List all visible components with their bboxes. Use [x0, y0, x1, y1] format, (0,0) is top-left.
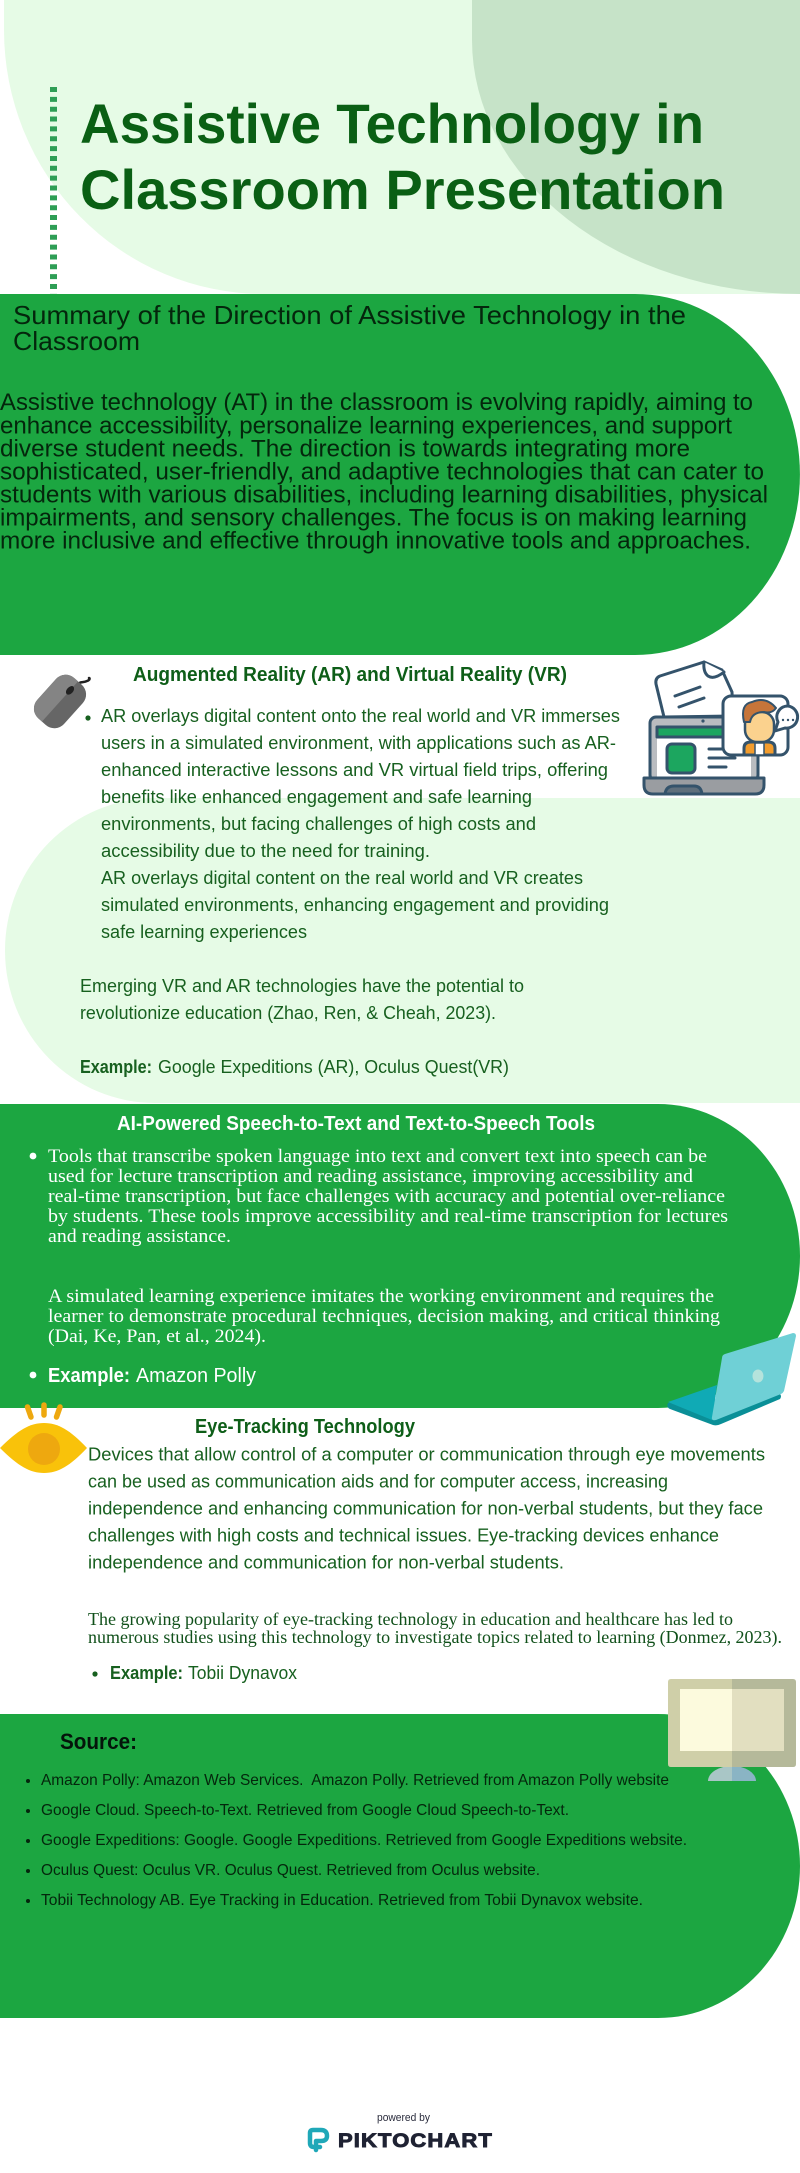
sources heading: Source:: [60, 1729, 137, 1754]
eye tracking example: [92, 1663, 297, 1683]
powered by label: powered by: [377, 2112, 430, 2124]
title: Classroom Presentation: [80, 158, 725, 221]
header background: darker green shape: [472, 0, 800, 294]
eye tracking example: Tobii Dynavox: [188, 1663, 297, 1683]
speech tools text: (Dai, Ke, Pan, et al., 2024).: [48, 1326, 266, 1347]
summary panel background: [0, 294, 800, 655]
eye tracking text: independence and communication for non-verbal students.: [88, 1552, 564, 1572]
powered by Piktochart logo: [310, 2112, 493, 2152]
AR VR bullet text: AR overlays digital content on the real world and VR creates: [101, 868, 583, 888]
summary text: diverse student needs. The direction is towards integrating more: [0, 436, 690, 462]
AR VR bullet text: accessibility due to the need for training.: [101, 841, 430, 861]
title: [80, 92, 725, 221]
speech tools text: used for lecture transcription and reading assistance, improving accessibility and: [48, 1166, 694, 1187]
eye tracking heading: Eye-Tracking Technology: [195, 1416, 416, 1438]
dotted vertical accent: [50, 87, 57, 294]
AR VR citation text: Emerging VR and AR technologies have the potential to: [80, 976, 524, 996]
eye tracking citation: The growing popularity of eye-tracking technology in education and healthcare has led to: [88, 1609, 733, 1629]
AR VR bullet text: environments, but facing challenges of high costs and: [101, 814, 536, 834]
panel: summary: [0, 294, 800, 655]
Piktochart mark: [310, 2130, 327, 2150]
summary text: enhance accessibility, personalize learning experiences, and support: [0, 412, 732, 440]
header background: pale green shape: [4, 0, 800, 294]
icon: teal laptop: [667, 1333, 796, 1425]
summary heading: Summary of the Direction of Assistive Technology in the: [13, 300, 686, 330]
eye tracking citation: numerous studies using this technology to investigate topics related to learning (Donmez, 2023).: [88, 1627, 782, 1648]
speech tools text: Tools that transcribe spoken language into text and convert text into speech can be: [48, 1146, 707, 1167]
icon: computer mouse: [29, 669, 91, 734]
sources panel background: [0, 1714, 800, 2018]
eye tracking example: Example:: [110, 1663, 183, 1683]
AR VR example: Example:: [80, 1057, 152, 1077]
AR VR bullet text: AR overlays digital content onto the real world and VR immerses: [101, 706, 620, 726]
summary text: [0, 389, 768, 554]
sources list: [26, 1772, 687, 1909]
AR VR citation text: [80, 976, 524, 1023]
speech tools example: [30, 1365, 256, 1387]
speech tools example: Amazon Polly: [136, 1365, 256, 1387]
icon: desktop monitor: [668, 1679, 796, 1781]
speech tools text: learner to demonstrate procedural techniques, decision making, and critical thinking: [48, 1306, 721, 1327]
speech tools example: Example:: [48, 1365, 130, 1387]
sources list: Amazon Polly: Amazon Web Services. Amazon Polly. Retrieved from Amazon Polly website: [41, 1772, 669, 1789]
panel: sources: [0, 1714, 800, 2018]
AR VR bullet text: [85, 706, 620, 942]
panel: AR and VR background: [5, 798, 800, 1103]
summary heading: Classroom: [13, 326, 140, 356]
eye tracking text: challenges with high costs and technical issues. Eye-tracking devices enhance: [88, 1526, 719, 1546]
summary text: more inclusive and effective through innovative tools and approaches.: [0, 528, 751, 554]
eye tracking text: Devices that allow control of a computer or communication through eye movements: [88, 1444, 765, 1464]
AR VR bullet text: benefits like enhanced engagement and safe learning: [101, 787, 532, 807]
eye tracking text: [88, 1444, 765, 1572]
AR VR bullet text: simulated environments, enhancing engagement and providing: [101, 895, 609, 915]
eye tracking citation: [88, 1609, 782, 1648]
sources list: Google Cloud. Speech-to-Text. Retrieved from Google Cloud Speech-to-Text.: [41, 1802, 569, 1819]
AR VR bullet text: users in a simulated environment, with applications such as AR-: [101, 733, 616, 753]
AR VR bullet text: enhanced interactive lessons and VR virtual field trips, offering: [101, 760, 608, 780]
panel: speech tools: [0, 1104, 800, 1408]
Piktochart wordmark: PIKTOCHART: [338, 2130, 493, 2152]
summary heading: [13, 300, 686, 356]
icon: laptop with document and person: [644, 662, 798, 794]
summary text: students with various disabilities, including learning disabilities, physical: [0, 482, 768, 508]
summary text: impairments, and sensory challenges. The focus is on making learning: [0, 504, 747, 532]
AR VR example: Google Expeditions (AR), Oculus Quest(VR): [158, 1057, 509, 1077]
speech tools panel background: [0, 1104, 800, 1408]
sources list: Tobii Technology AB. Eye Tracking in Education. Retrieved from Tobii Dynavox website.: [41, 1892, 643, 1909]
AR VR heading: Augmented Reality (AR) and Virtual Reality (VR): [133, 664, 567, 686]
sources list: Oculus Quest: Oculus VR. Oculus Quest. Retrieved from Oculus website.: [41, 1862, 540, 1879]
title: Assistive Technology in: [80, 92, 704, 155]
sources list: Google Expeditions: Google. Google Expeditions. Retrieved from Google Expeditions website.: [41, 1832, 687, 1849]
speech tools text: A simulated learning experience imitates the working environment and requires the: [48, 1286, 714, 1307]
speech tools heading: AI-Powered Speech-to-Text and Text-to-Speech Tools: [117, 1113, 595, 1135]
AR VR citation text: revolutionize education (Zhao, Ren, & Cheah, 2023).: [80, 1003, 496, 1023]
speech tools text: by students. These tools improve accessibility and real-time transcription for lectures: [48, 1206, 728, 1227]
eye tracking text: can be used as communication aids and for computer access, increasing: [88, 1472, 668, 1492]
summary text: sophisticated, user-friendly, and adaptive technologies that can cater to: [0, 458, 764, 486]
icon: yellow eye: [0, 1405, 87, 1473]
AR VR bullet text: safe learning experiences: [101, 922, 307, 942]
speech tools text: [30, 1146, 728, 1347]
eye tracking text: independence and enhancing communication for non-verbal students, but they face: [88, 1498, 763, 1518]
summary text: Assistive technology (AT) in the classroom is evolving rapidly, aiming to: [0, 389, 753, 416]
speech tools text: real-time transcription, but face challenges with accuracy and potential over-reliance: [48, 1186, 725, 1207]
speech tools text: and reading assistance.: [48, 1226, 231, 1247]
